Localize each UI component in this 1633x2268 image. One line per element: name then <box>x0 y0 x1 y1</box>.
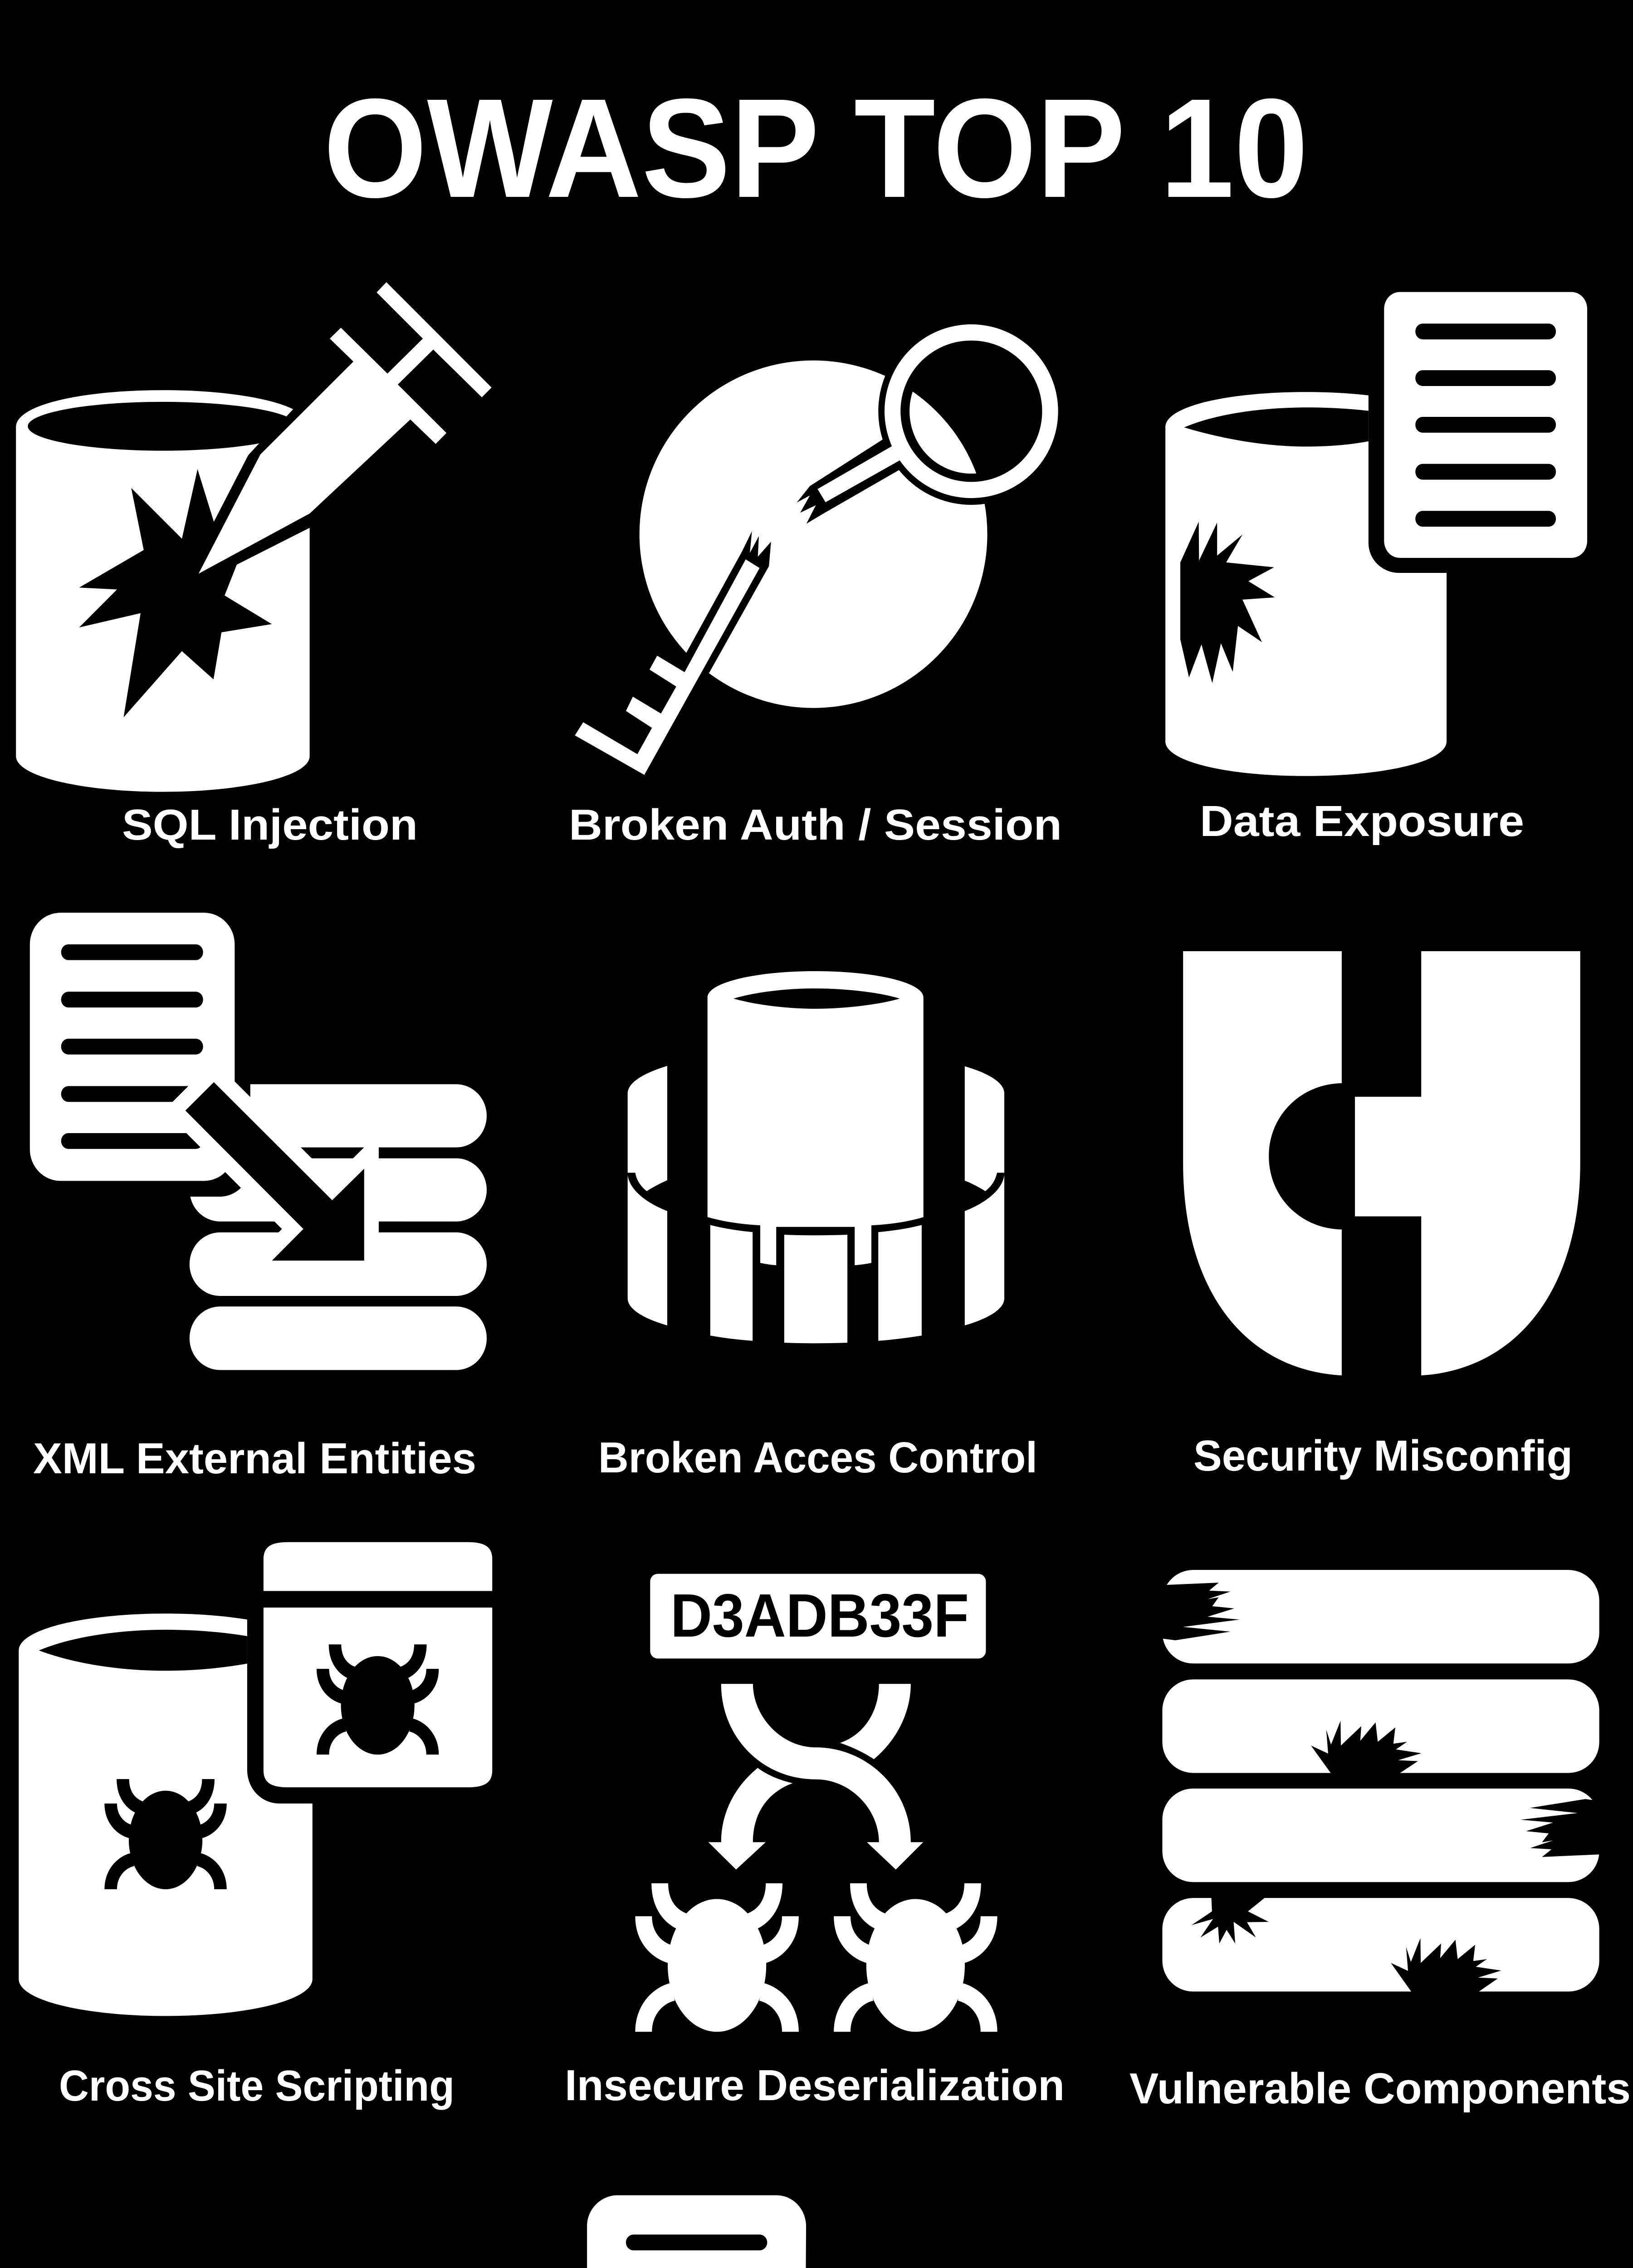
box text: D3ADB33F: D3ADB33F <box>670 1581 969 1650</box>
panel: Vulnerable Components <box>1129 1570 1631 2113</box>
label: SQL Injection: SQL Injection <box>122 801 418 849</box>
icon: split shield <box>1183 951 1580 1375</box>
panel: Broken Access Control <box>598 971 1037 1482</box>
label: Data Exposure: Data Exposure <box>1200 797 1524 846</box>
label: Vulnerable Components: Vulnerable Components <box>1129 2064 1631 2113</box>
panel: XML External Entities <box>7 892 487 1483</box>
title: OWASP TOP 10 <box>323 69 1308 227</box>
icon: document, question mark and heart <box>587 2195 1030 2268</box>
label: Insecure Deserialization: Insecure Deserialization <box>565 2061 1065 2110</box>
icon: circle with broken key and magnifier <box>575 318 1064 775</box>
panel: Cross Site Scripting <box>19 1542 492 2110</box>
icon: damaged stacked layers <box>1150 1570 1605 1996</box>
icon: cylinder with burst and document <box>1165 292 1587 776</box>
panel: Data Exposure <box>1165 292 1587 846</box>
icon: document, arrow and stacked layers <box>7 892 487 1370</box>
label: Broken Auth / Session: Broken Auth / Session <box>569 801 1062 849</box>
label: XML External Entities: XML External Entities <box>33 1434 476 1483</box>
icon: cylinder and browser window with bugs <box>19 1542 492 2016</box>
panel: SQL Injection <box>16 282 492 849</box>
icon: cylinder with syringe and burst <box>16 282 492 792</box>
panel: Security Misconfig <box>1183 951 1580 1480</box>
label: Security Misconfig: Security Misconfig <box>1193 1432 1573 1480</box>
label: Broken Acces Control: Broken Acces Control <box>598 1433 1037 1482</box>
icon: data box, crossing arrows and bugs <box>644 1574 989 2032</box>
panel: Insecure Deserialization <box>565 1574 1065 2110</box>
label: Cross Site Scripting: Cross Site Scripting <box>59 2062 455 2110</box>
panel: Broken Auth / Session <box>569 318 1064 849</box>
panel: Missing Logs, Monitoring <box>560 2195 1073 2268</box>
icon: cylinder with broken ring <box>628 971 1004 1343</box>
